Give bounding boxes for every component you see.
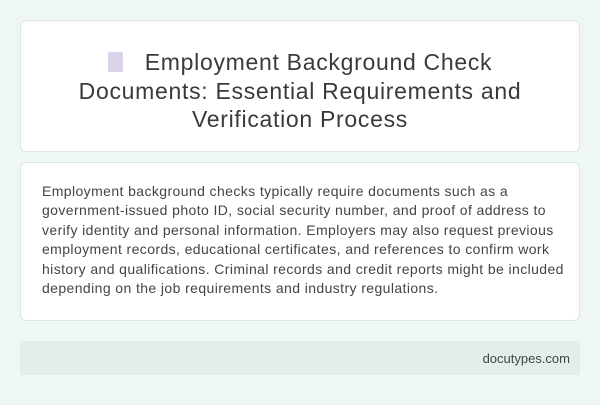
text block: description: history and qualifications. Criminal records and credit reports might be included [42, 261, 564, 277]
text block: description: government-issued photo ID, social security number, and proof of address to [42, 202, 546, 218]
footer text: source: docutypes.com [483, 351, 570, 366]
text block: description [42, 183, 564, 296]
text block: description: verify identity and personal information. Employers may also request previous [42, 222, 554, 238]
title [79, 49, 521, 132]
panel: header card [20, 20, 580, 152]
text block: description: Employment background checks typically require documents such as a [42, 183, 508, 199]
footer bar [20, 341, 580, 375]
text block: description: employment records, educational certificates, and references to confirm work [42, 241, 549, 257]
title: Employment Background Check [145, 49, 492, 75]
title: Documents: Essential Requirements and [79, 78, 521, 104]
icon: document [108, 52, 123, 72]
panel: description card [20, 162, 580, 321]
title: Verification Process [192, 106, 408, 132]
text block: description: depending on the job requirements and industry regulations. [42, 280, 438, 296]
